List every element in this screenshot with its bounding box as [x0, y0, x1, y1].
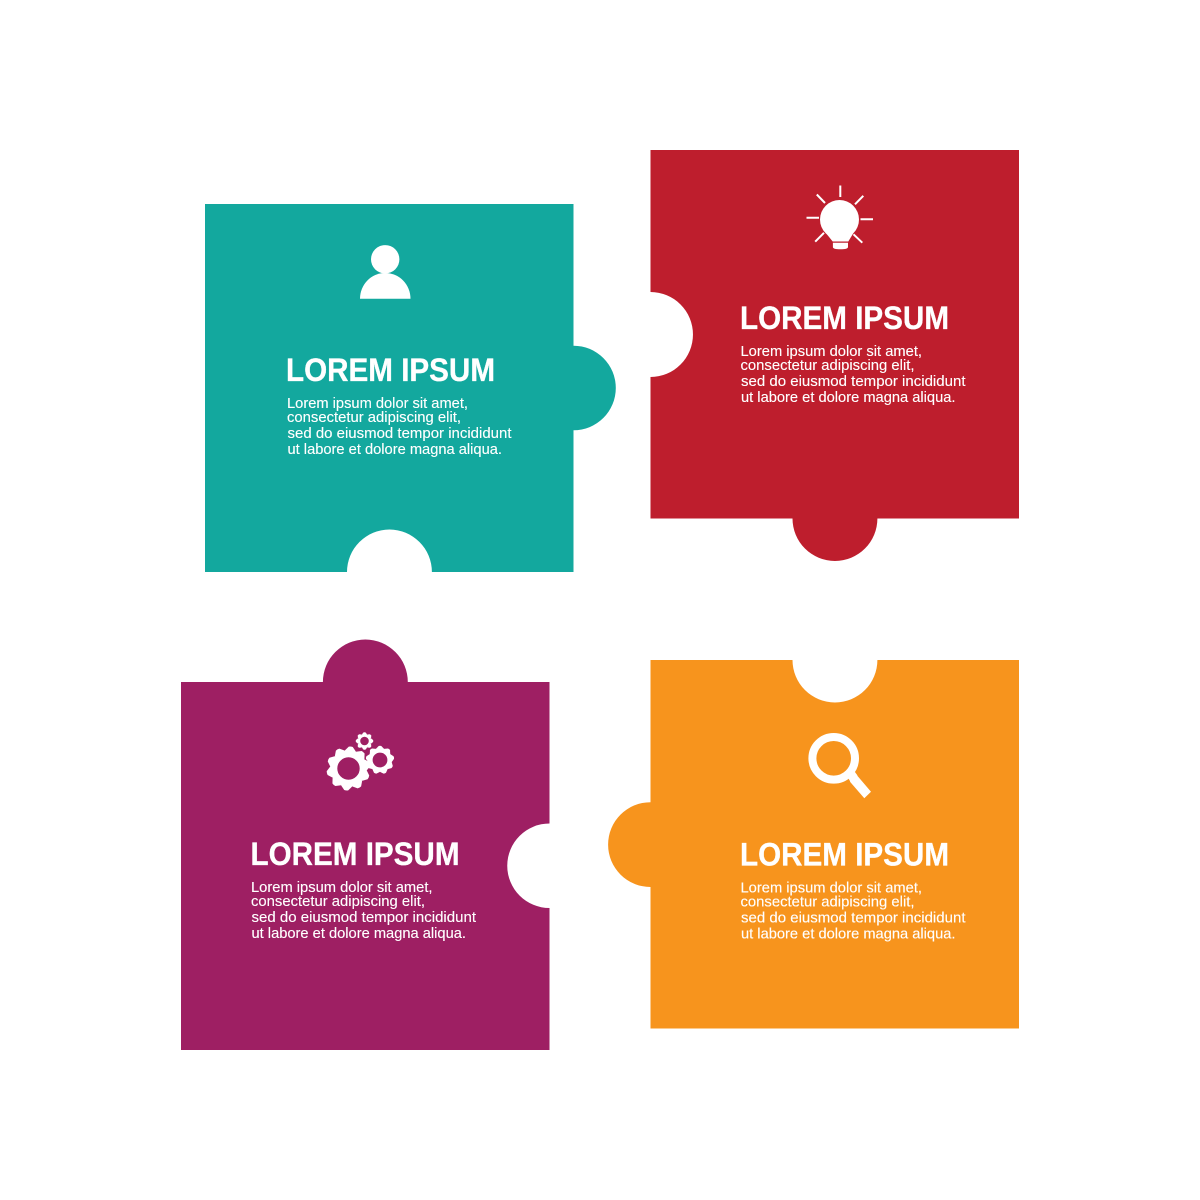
text block: orange	[740, 880, 966, 942]
text block: red	[740, 344, 966, 406]
text block: red: ut labore et dolore magna aliqua.	[741, 390, 956, 406]
text block: teal: Lorem ipsum dolor sit amet,	[287, 396, 468, 412]
text block: purple: consectetur adipiscing elit,	[251, 894, 425, 910]
text block: teal: consectetur adipiscing elit,	[287, 410, 461, 426]
red piece shape	[650, 150, 1019, 561]
heading: orange: LOREM IPSUM	[740, 836, 949, 872]
panel: orange puzzle piece	[608, 660, 1019, 1028]
text block: red: consectetur adipiscing elit,	[740, 358, 914, 374]
heading: purple: LOREM IPSUM	[250, 836, 460, 872]
orange piece shape	[608, 660, 1019, 1028]
panel: teal puzzle piece	[205, 204, 616, 572]
text block: purple	[251, 880, 476, 942]
purple piece shape	[181, 640, 550, 1050]
text block: red: sed do eiusmod tempor incididunt	[741, 374, 966, 390]
text block: red: Lorem ipsum dolor sit amet,	[740, 344, 922, 360]
teal piece shape	[205, 204, 616, 572]
heading: red: LOREM IPSUM	[740, 300, 949, 336]
text block: teal	[287, 396, 512, 458]
text block: purple: Lorem ipsum dolor sit amet,	[251, 880, 432, 896]
text block: orange: consectetur adipiscing elit,	[740, 894, 914, 910]
text block: orange: ut labore et dolore magna aliqua.	[741, 926, 956, 942]
heading: teal: LOREM IPSUM	[286, 352, 495, 388]
icon: light bulb	[806, 186, 873, 249]
icon: magnifying glass	[812, 737, 871, 798]
icon: person	[360, 245, 410, 299]
text block: teal: sed do eiusmod tempor incididunt	[288, 426, 512, 442]
text block: orange: sed do eiusmod tempor incididunt	[741, 910, 966, 926]
text block: orange: Lorem ipsum dolor sit amet,	[740, 880, 922, 896]
text block: purple: sed do eiusmod tempor incididunt	[252, 910, 476, 926]
panel: red puzzle piece	[650, 150, 1019, 561]
text block: teal: ut labore et dolore magna aliqua.	[288, 442, 502, 458]
panel: purple puzzle piece	[181, 640, 550, 1050]
icon: gears	[326, 732, 395, 791]
text block: purple: ut labore et dolore magna aliqua.	[252, 926, 466, 942]
